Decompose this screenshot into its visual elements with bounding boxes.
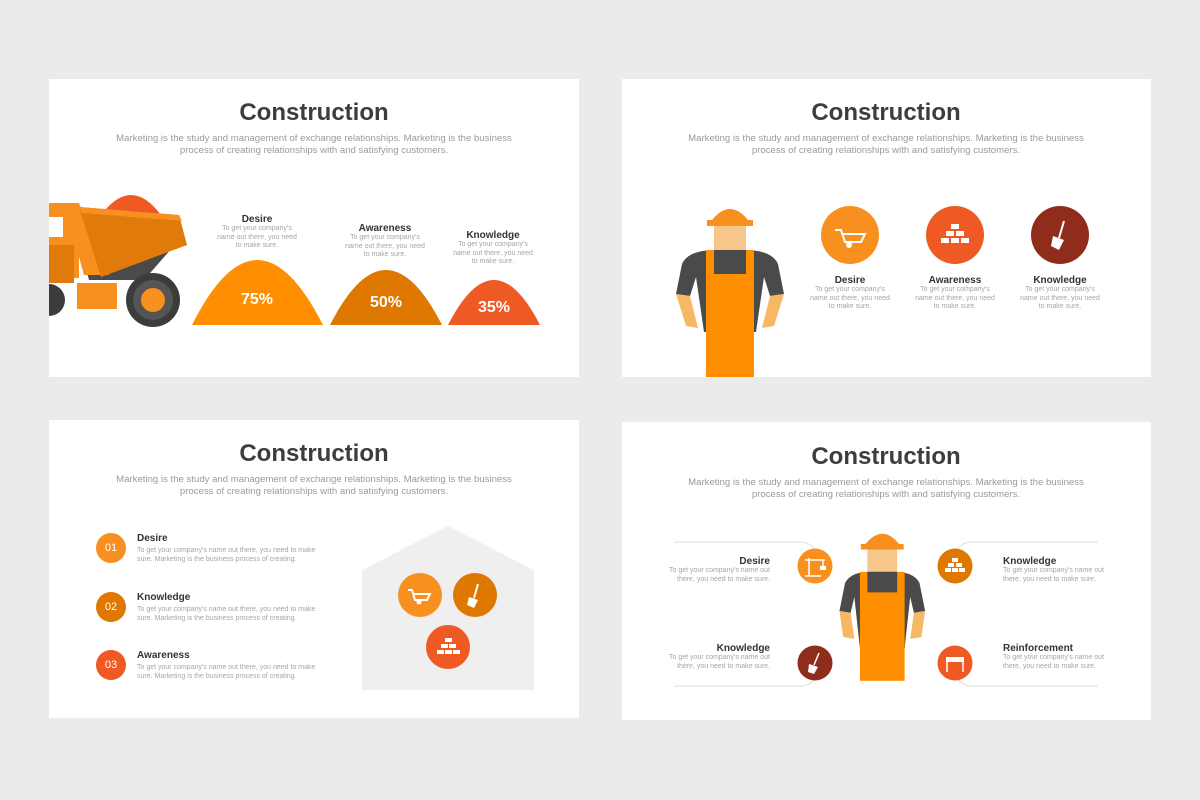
subtitle 2: [688, 133, 1084, 156]
list item 01: 01: [105, 542, 117, 554]
label: Knowledge 4 left: [669, 643, 770, 670]
label: Knowledge: [453, 230, 533, 265]
list item 03: To get your company's name out there, you need to make sure. Marketing is the business process of creating.: [137, 664, 315, 680]
subtitle 1: [116, 133, 512, 156]
list item 03: [96, 650, 316, 680]
list item 03: 03: [105, 659, 117, 671]
subtitle 3: [116, 474, 512, 497]
icon: crane: [798, 548, 832, 584]
subtitle 2: Marketing is the study and management of exchange relationships. Marketing is the business: [688, 133, 1084, 144]
icon: bricks circle: [926, 206, 984, 264]
label: Reinforcement: To get your company's name out: [1003, 654, 1104, 661]
subtitle 1: process of creating relationships with and satisfying customers.: [180, 145, 448, 156]
list item 01: Desire: [137, 533, 168, 544]
label: Knowledge 4 right: To get your company's name out: [1003, 567, 1104, 574]
label: Desire 2: name out there, you need: [810, 294, 890, 302]
icon: shovel: [798, 646, 832, 680]
label: Desire 2: to make sure.: [829, 303, 871, 310]
label: Knowledge: name out there, you need: [453, 250, 533, 256]
title 1: Construction: [239, 99, 389, 126]
label: Knowledge 4 right: [1003, 556, 1104, 582]
list item 03: Awareness: [137, 650, 190, 661]
label: Desire 4: To get your company's name out: [669, 567, 770, 574]
label: Knowledge 4 right: there, you need to make sure.: [1003, 576, 1096, 582]
label: Knowledge 4 left: To get your company's name out: [669, 654, 770, 661]
label: Reinforcement: there, you need to make sure.: [1003, 662, 1096, 670]
label: Desire: [217, 214, 297, 249]
chart: mounds: 35%: [478, 299, 510, 316]
list item 02: 02: [105, 601, 117, 613]
label: Awareness: Awareness: [359, 223, 411, 234]
panel: dump truck percentages: [49, 79, 579, 377]
label: Reinforcement: [1003, 643, 1104, 670]
label: Awareness: To get your company's: [350, 234, 420, 241]
illustration: worker 2: [840, 534, 926, 681]
list item 02: To get your company's name out there, you need to make sure. Marketing is the business process of creating.: [137, 606, 315, 622]
label: Knowledge: To get your company's: [458, 241, 528, 248]
chart: mounds: 75%: [241, 291, 273, 308]
label: Desire 2: [810, 275, 890, 310]
chart: mounds: 50%: [370, 294, 402, 311]
label: Knowledge: Knowledge: [466, 230, 520, 241]
label: Knowledge 2: To get your company's: [1025, 286, 1095, 293]
label: Awareness 2: [915, 275, 995, 310]
label: Awareness: [345, 223, 425, 258]
panel: numbered list house: [49, 420, 579, 718]
label: Awareness: name out there, you need: [345, 242, 425, 250]
label: Knowledge 4 left: Knowledge: [717, 643, 770, 654]
icon: wheelbarrow circle: [821, 206, 879, 264]
icon: barrier: [938, 646, 972, 680]
label: Desire: to make sure.: [236, 242, 278, 249]
label: Knowledge: to make sure.: [472, 258, 514, 265]
subtitle 3: Marketing is the study and management of exchange relationships. Marketing is the business: [116, 474, 512, 485]
label: Awareness 2: Awareness: [929, 275, 981, 286]
label: Desire 4: [669, 556, 770, 582]
connector lines panel 4: [674, 542, 1098, 686]
label: Knowledge 2: name out there, you need: [1020, 294, 1100, 302]
list item 01: [96, 533, 316, 563]
subtitle 3: process of creating relationships with and satisfying customers.: [180, 486, 448, 497]
label: Knowledge 2: [1020, 275, 1100, 310]
label: Desire 4: Desire: [739, 556, 770, 567]
label: Desire: Desire: [242, 214, 272, 225]
label: Desire: name out there, you need: [217, 234, 297, 240]
label: Awareness 2: to make sure.: [934, 303, 976, 310]
subtitle 2: process of creating relationships with and satisfying customers.: [752, 145, 1020, 156]
label: Awareness 2: To get your company's: [920, 286, 990, 293]
subtitle 4: Marketing is the study and management of exchange relationships. Marketing is the business: [688, 477, 1084, 488]
list item 02: Knowledge: [137, 592, 190, 603]
label: Knowledge 2: Knowledge: [1033, 275, 1087, 286]
label: Knowledge 4 left: there, you need to make sure.: [677, 662, 770, 670]
label: Knowledge 4 right: Knowledge: [1003, 556, 1056, 567]
subtitle 1: Marketing is the study and management of exchange relationships. Marketing is the business: [116, 133, 512, 144]
list item 02: [96, 592, 316, 622]
title 3: Construction: [239, 440, 389, 467]
title 2: Construction: [811, 99, 961, 126]
label: Desire 2: To get your company's: [815, 286, 885, 293]
house with icons: [362, 526, 534, 690]
panel: worker icons: [622, 79, 1151, 377]
subtitle 4: process of creating relationships with and satisfying customers.: [752, 489, 1020, 500]
label: Desire 2: Desire: [835, 275, 865, 286]
chart: mounds: [192, 260, 540, 325]
label: Desire: To get your company's: [222, 225, 292, 232]
label: Awareness: to make sure.: [364, 251, 406, 258]
label: Awareness 2: name out there, you need: [915, 294, 995, 302]
panel: worker four items: [622, 422, 1151, 720]
icon: shovel circle: [1031, 206, 1089, 264]
list item 01: To get your company's name out there, you need to make sure. Marketing is the business process of creating.: [137, 547, 315, 562]
label: Desire 4: there, you need to make sure.: [677, 576, 770, 582]
subtitle 4: [688, 477, 1084, 500]
icon: bricks: [938, 548, 972, 584]
title 4: Construction: [811, 443, 961, 470]
illustration: worker 1: [676, 209, 784, 377]
illustration: dump truck: [49, 195, 187, 327]
label: Knowledge 2: to make sure.: [1039, 303, 1081, 310]
label: Reinforcement: Reinforcement: [1003, 643, 1073, 654]
